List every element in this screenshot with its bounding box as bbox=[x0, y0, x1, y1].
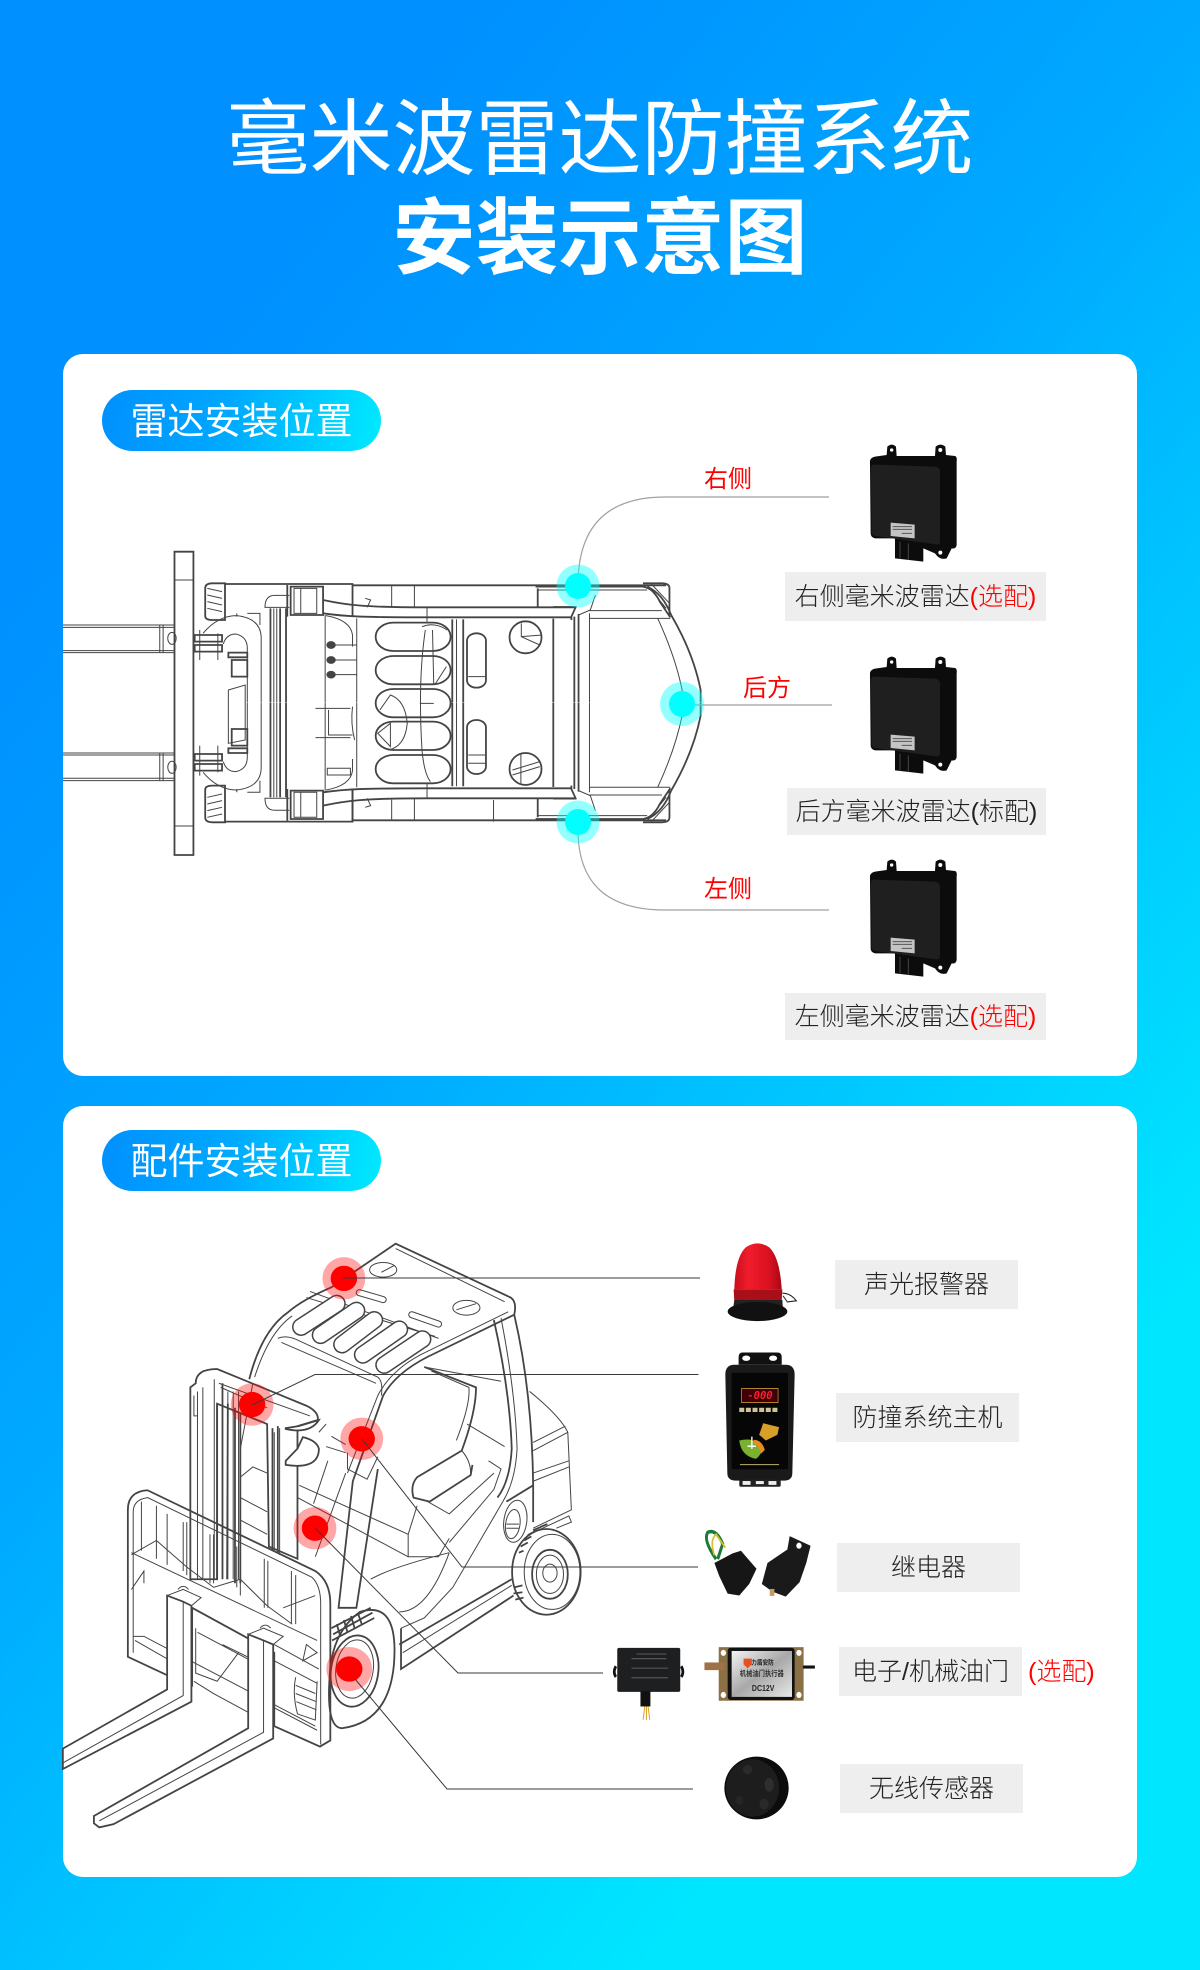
leader line: host unit bbox=[252, 1374, 698, 1405]
label: relay: 继电器 bbox=[891, 1554, 966, 1582]
markers: accessory positions bbox=[231, 1257, 383, 1691]
leader line: throttle bbox=[315, 1528, 603, 1673]
label: alarm: 声光报警器 bbox=[864, 1271, 989, 1299]
panel: radar install position bbox=[63, 354, 1137, 1076]
heading pill: accessories install position: 配件安装位置 bbox=[130, 1141, 352, 1182]
icon: rear radar device bbox=[870, 657, 957, 774]
icon: left radar device bbox=[870, 860, 957, 977]
marker: rear radar bbox=[660, 682, 704, 726]
heading pill: radar install position bbox=[102, 390, 381, 451]
icon: right radar device bbox=[870, 445, 957, 562]
hook arms on mast top bbox=[286, 1420, 319, 1466]
label: throttle optional: (选配) bbox=[1028, 1658, 1095, 1686]
label: right radar: 右侧毫米波雷达(选配) bbox=[795, 583, 1036, 611]
heading pill: accessories install position bbox=[102, 1130, 381, 1191]
icon: electronic throttle module bbox=[614, 1648, 683, 1720]
connector: left radar to device bbox=[578, 830, 829, 910]
label: throttle: 电子/机械油门 bbox=[852, 1658, 1009, 1686]
label: alarm bbox=[835, 1260, 1018, 1309]
tag: left side: 左侧 bbox=[704, 876, 752, 903]
connector: rear radar to device bbox=[682, 704, 832, 706]
icon: mechanical throttle actuator: 力盾安防 bbox=[751, 1658, 774, 1667]
connector: right radar to device bbox=[578, 497, 829, 585]
icon: mechanical throttle actuator: DC12V bbox=[752, 1683, 774, 1693]
marker: right radar bbox=[556, 564, 600, 608]
label: wireless sensor bbox=[840, 1764, 1023, 1813]
top-view forklift drawing bbox=[63, 552, 701, 855]
title: line 2: 安装示意图 bbox=[392, 192, 808, 285]
label: wireless sensor: 无线传感器 bbox=[869, 1775, 994, 1803]
label: left radar: 左侧毫米波雷达(选配) bbox=[795, 1003, 1036, 1031]
icon: mechanical throttle actuator: 机械油门执行器 bbox=[740, 1668, 784, 1678]
tag: right side: 右侧 bbox=[704, 466, 752, 493]
icon: mechanical throttle actuator bbox=[704, 1647, 815, 1701]
icon: wireless sensor bbox=[724, 1757, 789, 1819]
leader line: alarm bbox=[343, 1277, 700, 1279]
label: relay bbox=[837, 1543, 1020, 1592]
label: host unit bbox=[836, 1393, 1019, 1442]
label: left radar bbox=[785, 993, 1046, 1040]
leader line: wireless sensor bbox=[355, 1679, 693, 1789]
icon: sound-light alarm bbox=[728, 1243, 796, 1321]
label: right radar bbox=[785, 572, 1046, 621]
icon: anti-collision host unit bbox=[725, 1352, 795, 1487]
heading pill: radar install position: 雷达安装位置 bbox=[130, 401, 352, 442]
icon: anti-collision host unit: -000 bbox=[747, 1390, 773, 1403]
label: throttle bbox=[839, 1647, 1022, 1696]
panel: accessories install position bbox=[63, 1106, 1137, 1877]
perspective forklift drawing bbox=[63, 1244, 581, 1827]
label: rear radar bbox=[787, 788, 1046, 835]
label: host unit: 防撞系统主机 bbox=[852, 1404, 1002, 1432]
title: line 1: 毫米波雷达防撞系统 bbox=[226, 93, 974, 186]
tag: rear: 后方 bbox=[743, 675, 791, 702]
icon: relay with socket bbox=[706, 1532, 811, 1597]
marker: left radar bbox=[556, 800, 600, 844]
label: rear radar: 后方毫米波雷达(标配) bbox=[796, 798, 1037, 826]
leader line: relay bbox=[362, 1439, 698, 1567]
